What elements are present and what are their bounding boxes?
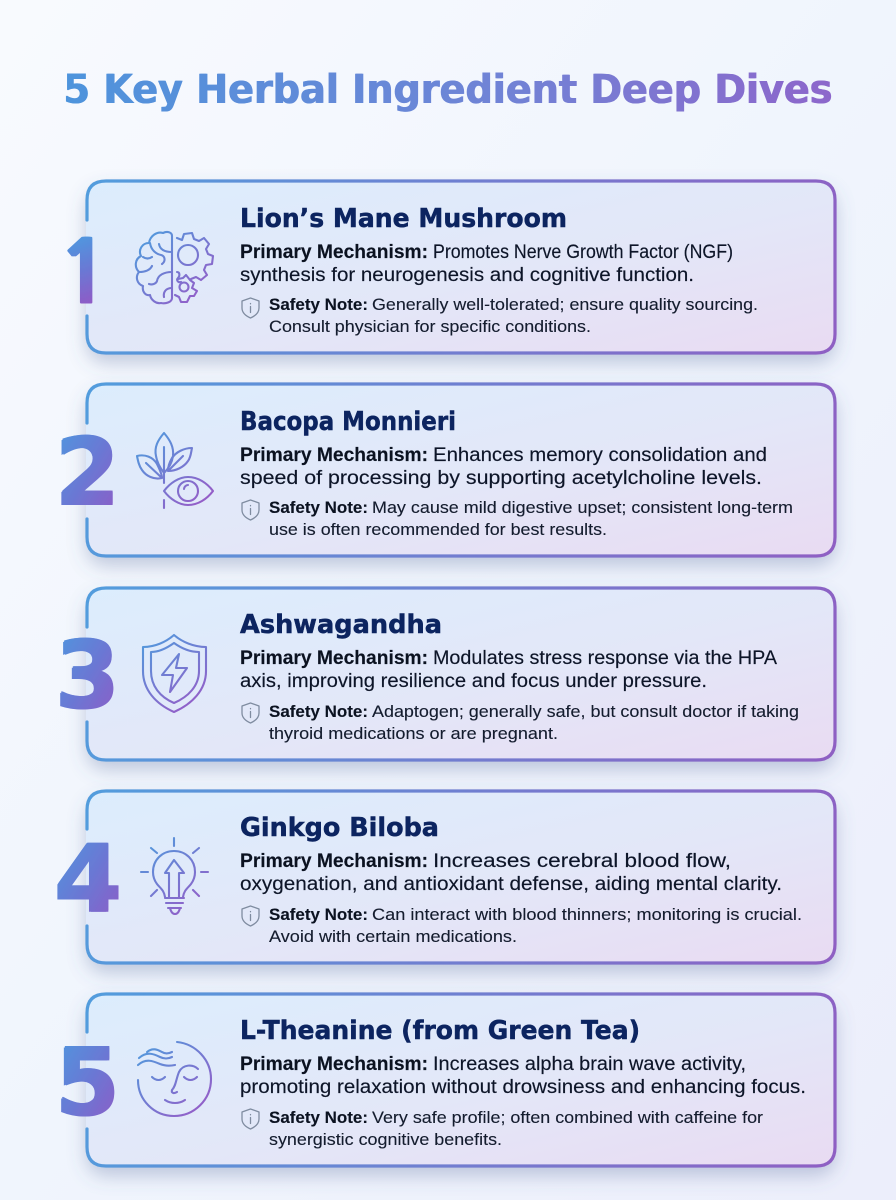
primary mechanism text: Primary Mechanism: [240, 1054, 428, 1075]
icon: brain and gears [136, 232, 213, 303]
primary mechanism text [240, 242, 733, 286]
safety note text: Avoid with certain medications. [269, 927, 517, 946]
number 3: 3 [54, 622, 119, 730]
primary mechanism text: Primary Mechanism: [240, 648, 428, 669]
primary mechanism text: Modulates stress response via the HPA [433, 648, 777, 669]
number 2: 2 [54, 419, 119, 527]
primary mechanism text [240, 445, 767, 489]
safety note text: Adaptogen; generally safe, but consult doctor if taking [372, 702, 799, 721]
primary mechanism text: speed of processing by supporting acetylcholine levels. [240, 468, 762, 489]
safety note text: May cause mild digestive upset; consistent long-term [372, 498, 793, 517]
icon: shield with lightning bolt [143, 635, 206, 712]
panel: Lion's Mane Mushroom [56, 180, 836, 354]
primary mechanism text: Primary Mechanism: [240, 851, 428, 872]
icon: safety shield [242, 906, 259, 926]
safety note text: Safety Note: [269, 1108, 368, 1127]
safety note text [269, 295, 758, 336]
panel: L-Theanine [54, 993, 836, 1167]
number 5: 5 [54, 1029, 119, 1137]
primary mechanism text: Increases cerebral blood flow, [433, 851, 731, 872]
icon: leaves and eye [137, 433, 213, 508]
panel: Ginkgo Biloba [53, 790, 836, 964]
safety note text: Consult physician for specific conditions. [269, 317, 591, 336]
icon: calm face with waves [138, 1042, 211, 1116]
number 4: 4 [53, 826, 121, 934]
safety note text [269, 1108, 763, 1149]
icon: safety shield [242, 500, 259, 520]
safety note text: synergistic cognitive benefits. [269, 1130, 502, 1149]
number 1: 1 [56, 230, 109, 317]
safety note text: Safety Note: [269, 295, 368, 314]
primary mechanism text: Primary Mechanism: [240, 445, 428, 466]
heading: Ginkgo Biloba [240, 813, 439, 843]
primary mechanism text: Promotes Nerve Growth Factor (NGF) [433, 242, 733, 263]
safety note text: thyroid medications or are pregnant. [269, 724, 558, 743]
primary mechanism text: axis, improving resilience and focus under pressure. [240, 671, 707, 692]
safety note text [269, 905, 802, 946]
icon: safety shield [242, 1109, 259, 1129]
panel: Bacopa Monnieri [54, 383, 836, 557]
primary mechanism text [240, 851, 782, 895]
heading: L-Theanine (from Green Tea) [240, 1016, 640, 1046]
primary mechanism text: Primary Mechanism: [240, 242, 428, 263]
primary mechanism text: Increases alpha brain wave activity, [433, 1054, 746, 1075]
safety note text: Safety Note: [269, 905, 368, 924]
primary mechanism text: oxygenation, and antioxidant defense, aiding mental clarity. [240, 874, 782, 895]
heading: Ashwagandha [240, 610, 442, 640]
safety note text: use is often recommended for best results. [269, 520, 607, 539]
primary mechanism text: synthesis for neurogenesis and cognitive function. [240, 265, 694, 286]
safety note text [269, 702, 799, 743]
icon: safety shield [242, 703, 259, 723]
safety note text: Safety Note: [269, 702, 368, 721]
heading: Bacopa Monnieri [240, 407, 456, 437]
safety note text: Generally well-tolerated; ensure quality sourcing. [372, 295, 758, 314]
title: 5 Key Herbal Ingredient Deep Dives [63, 67, 832, 113]
heading: Lion’s Mane Mushroom [240, 204, 567, 234]
icon: safety shield [242, 298, 259, 318]
safety note text: Very safe profile; often combined with caffeine for [372, 1108, 763, 1127]
icon: light bulb with arrow [141, 838, 208, 914]
primary mechanism text: Enhances memory consolidation and [433, 445, 767, 466]
primary mechanism text [240, 648, 777, 692]
panel: Ashwagandha [54, 587, 836, 761]
safety note text: Can interact with blood thinners; monitoring is crucial. [372, 905, 802, 924]
safety note text: Safety Note: [269, 498, 368, 517]
safety note text [269, 498, 793, 539]
primary mechanism text: promoting relaxation without drowsiness and enhancing focus. [240, 1077, 806, 1098]
primary mechanism text [240, 1054, 806, 1098]
